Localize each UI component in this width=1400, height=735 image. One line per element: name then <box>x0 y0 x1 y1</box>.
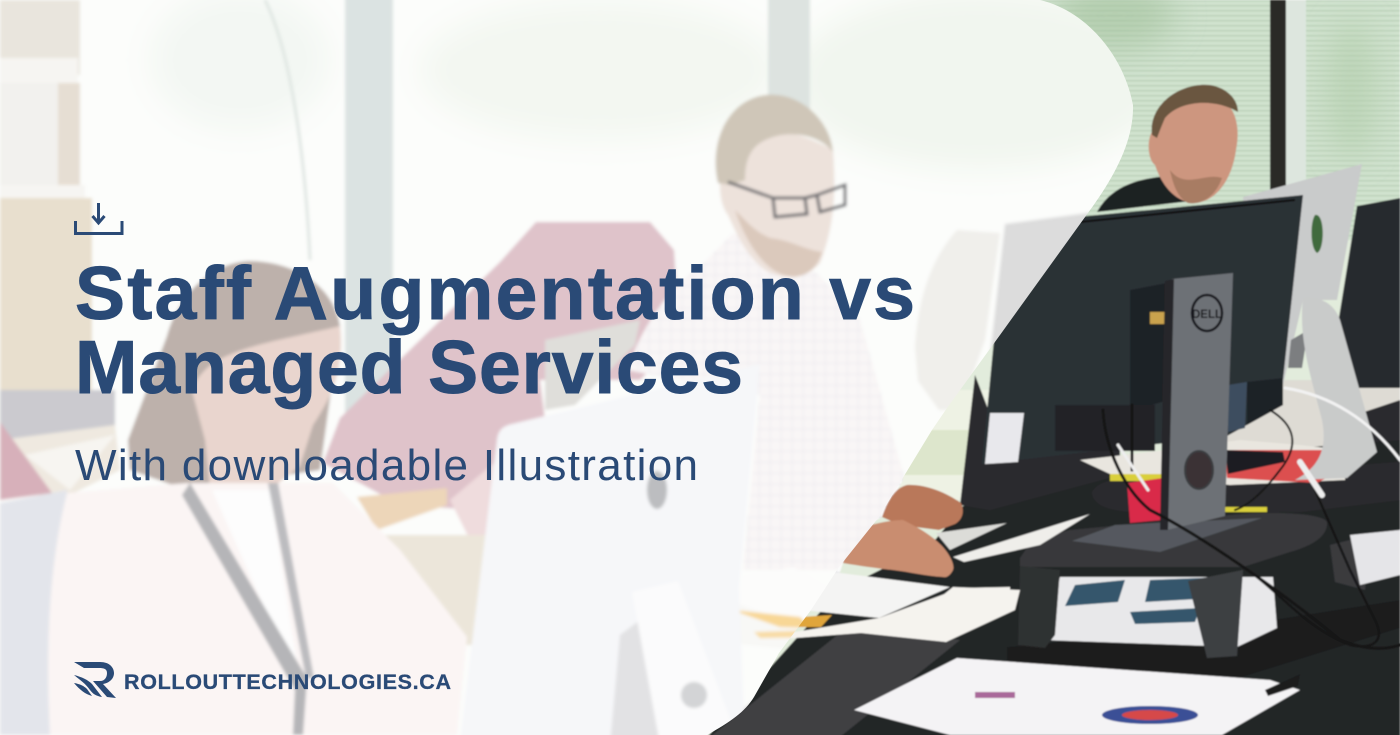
washed man <box>627 95 905 570</box>
monitor riser <box>1007 513 1400 680</box>
logo mark <box>74 662 116 698</box>
washed woman <box>48 261 467 735</box>
man on the right <box>1097 85 1238 212</box>
back desk clutter behind monitors <box>1225 380 1400 470</box>
desk documents <box>729 567 1300 735</box>
title: Managed Services <box>75 325 743 409</box>
papers and red notebook <box>1080 440 1400 523</box>
silver iMac stand <box>1295 298 1377 480</box>
Dell stand <box>1072 273 1262 552</box>
Dell stand: DELL <box>1192 309 1222 321</box>
second dark monitor <box>1335 198 1400 388</box>
icon: download <box>76 203 122 234</box>
title <box>75 251 915 409</box>
washed shelves <box>0 0 120 495</box>
washed grey monitor <box>545 320 640 410</box>
washed side chair <box>0 490 67 735</box>
subtitle: With downloadable Illustration <box>75 441 698 490</box>
washed Dell monitor <box>990 212 1088 348</box>
cables <box>1103 388 1400 648</box>
washed floor and table <box>357 488 485 645</box>
washed jacket <box>915 230 1000 410</box>
website label: ROLLOUTTECHNOLOGIES.CA <box>124 670 451 694</box>
man's shirt sleeve <box>740 340 903 585</box>
keyboard and hands <box>843 485 1090 577</box>
washed papers <box>738 608 804 640</box>
washed red chair <box>0 222 680 540</box>
Dell monitor <box>982 195 1303 464</box>
silver iMac back <box>1243 164 1362 385</box>
title: Staff Augmentation vs <box>75 251 915 335</box>
washed desk <box>743 701 751 710</box>
dark chair <box>960 375 1120 510</box>
label sticker <box>985 413 1024 464</box>
desk <box>700 440 1400 735</box>
washed foreground iMac <box>471 415 744 735</box>
